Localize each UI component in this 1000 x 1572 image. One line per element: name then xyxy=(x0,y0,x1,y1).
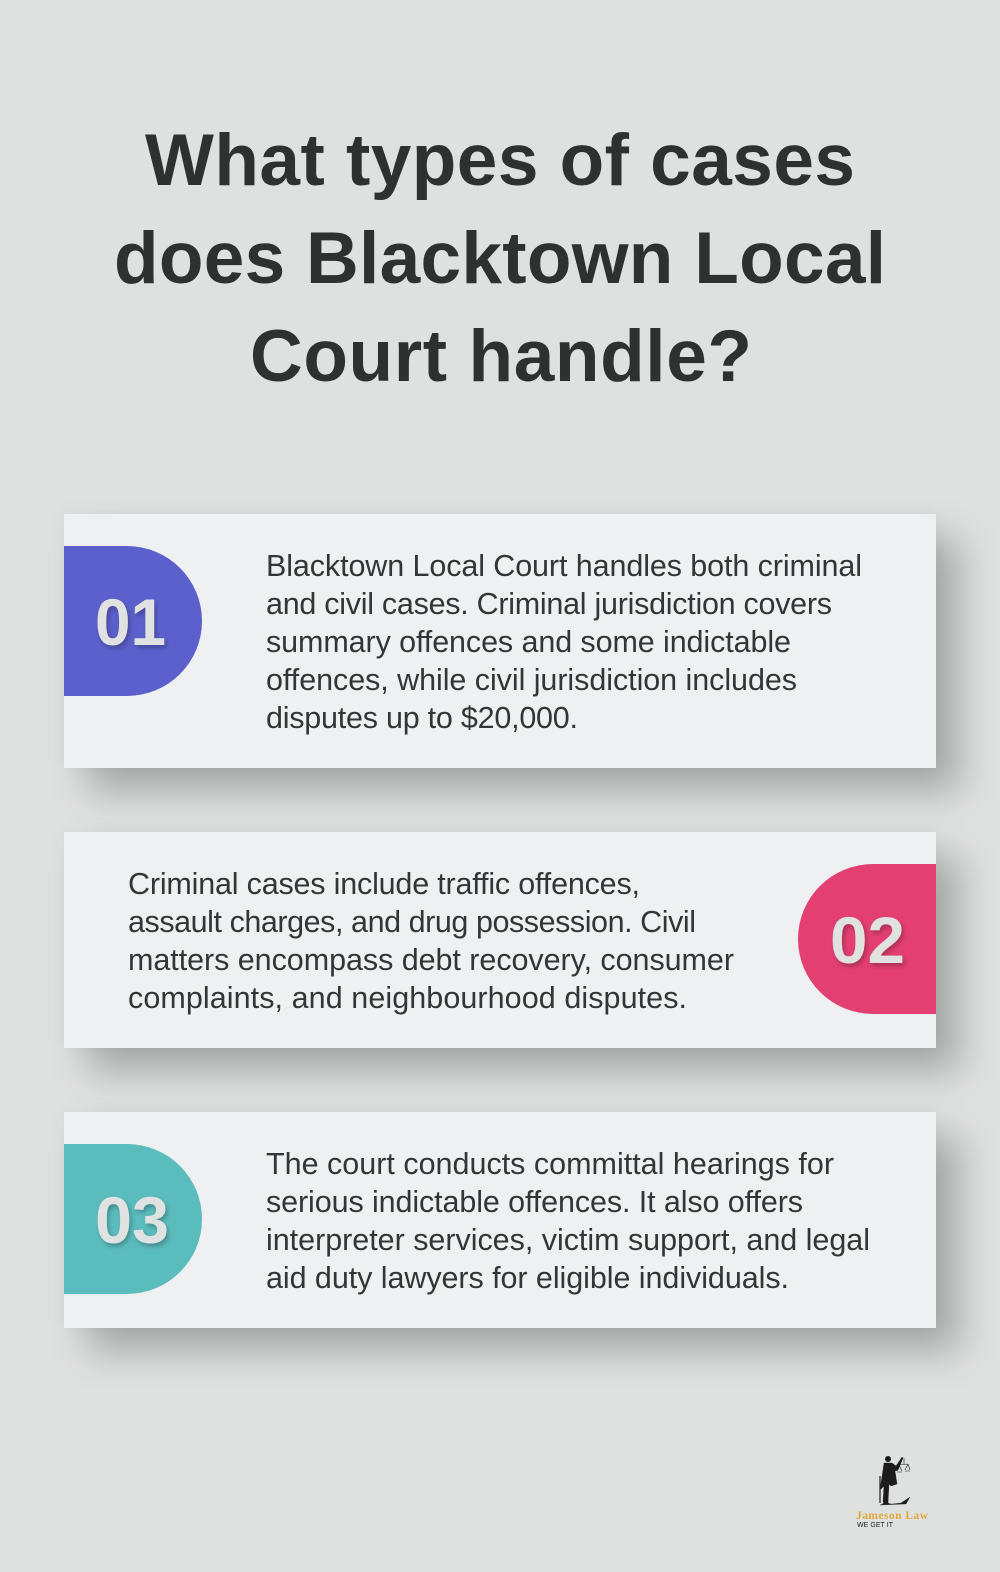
card 03 text: The court conducts committal hearings for xyxy=(266,1147,834,1181)
card 01 text: and civil cases. Criminal jurisdiction covers xyxy=(266,587,832,621)
card 02 text: matters encompass debt recovery, consumer xyxy=(128,943,734,977)
title xyxy=(114,120,886,397)
icon: lady justice xyxy=(880,1456,910,1505)
badge 03: 03 xyxy=(95,1183,169,1257)
card 01 text: offences, while civil jurisdiction includes xyxy=(266,663,797,697)
badge 02: 02 xyxy=(830,903,905,977)
card 02 text: Criminal cases include traffic offences, xyxy=(128,867,640,901)
card 01 text xyxy=(266,549,862,735)
card 02 text: assault charges, and drug possession. Civil xyxy=(128,905,696,939)
title: What types of cases xyxy=(145,120,855,201)
card 03 text: aid duty lawyers for eligible individuals. xyxy=(266,1261,789,1295)
panel: card 02 xyxy=(64,832,936,1048)
card 02 text xyxy=(128,867,734,1015)
panel: card 03 xyxy=(64,1112,936,1328)
title: does Blacktown Local xyxy=(114,218,886,299)
card 03 text: serious indictable offences. It also offers xyxy=(266,1185,803,1219)
card 01 background xyxy=(64,514,936,768)
card 02 background xyxy=(64,832,936,1048)
card 02 text: complaints, and neighbourhood disputes. xyxy=(128,981,687,1015)
card 01 text: summary offences and some indictable xyxy=(266,625,791,659)
logo: Jameson Law xyxy=(856,1456,929,1529)
card 03 text xyxy=(266,1147,870,1295)
card 03 background xyxy=(64,1112,936,1328)
card 01 text: disputes up to $20,000. xyxy=(266,701,578,735)
badge 02 xyxy=(798,864,936,1014)
card 03 text: interpreter services, victim support, and legal xyxy=(266,1223,870,1257)
logo name: Jameson Law xyxy=(856,1510,929,1522)
card 01 text: Blacktown Local Court handles both criminal xyxy=(266,549,862,583)
logo tagline: WE GET IT xyxy=(857,1522,894,1529)
badge 01: 01 xyxy=(95,585,166,659)
title: Court handle? xyxy=(250,316,752,397)
badge 01 xyxy=(64,546,202,696)
badge 03 xyxy=(64,1144,202,1294)
panel: card 01 xyxy=(64,514,936,768)
